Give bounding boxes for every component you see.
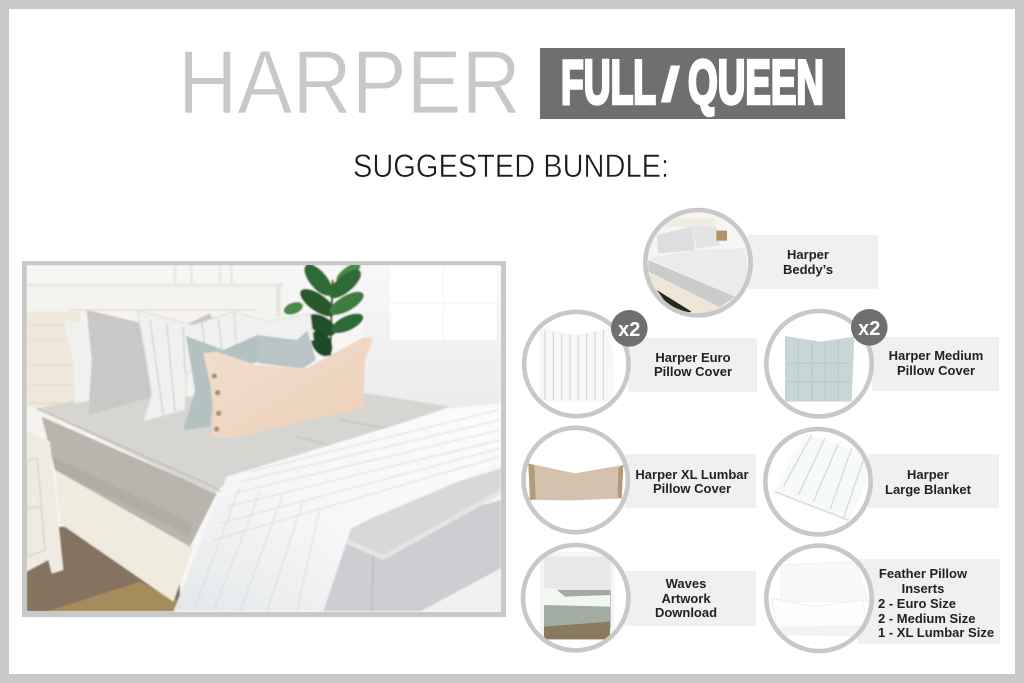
floor and rug	[27, 527, 180, 612]
blanket	[173, 403, 501, 612]
circle ring	[524, 428, 628, 532]
label text	[655, 576, 717, 620]
label text: 2 - Medium Size	[878, 611, 976, 626]
label panel	[872, 337, 999, 391]
label panel	[748, 235, 878, 289]
item: Harper Beddy's	[642, 207, 878, 320]
circle ring	[766, 311, 872, 416]
heading: suggested bundle: SUGGESTED BUNDLE:	[353, 148, 669, 184]
far side of mattress	[323, 500, 501, 612]
label text	[635, 467, 749, 496]
label text	[783, 247, 833, 277]
size badge: Full/Queen	[540, 48, 845, 119]
label text: 2 - Euro Size	[878, 596, 956, 611]
striped euro pillow	[137, 311, 237, 422]
quantity badge	[611, 310, 648, 347]
circle ring	[524, 312, 628, 416]
label text: Harper Euro	[655, 350, 731, 365]
label text: Harper XL Lumbar	[635, 467, 749, 482]
size badge: Full/Queen: FULL	[561, 48, 656, 118]
lumbar pillow	[203, 337, 373, 438]
item image	[785, 336, 854, 402]
label text: Feather Pillow	[879, 566, 968, 581]
label panel	[625, 454, 756, 508]
quilted top	[37, 393, 450, 493]
label text	[878, 566, 994, 640]
label text: Harper Medium	[889, 348, 983, 363]
label text: Artwork	[661, 591, 711, 606]
headboard	[27, 284, 284, 408]
label panel	[628, 338, 757, 392]
label panel	[868, 454, 999, 508]
item: Harper XL Lumbar Pillow Cover	[522, 427, 756, 537]
label text: Waves	[666, 576, 706, 591]
bed frame	[55, 471, 193, 602]
label text: Inserts	[902, 581, 944, 596]
panel: bedroom photo	[24, 260, 504, 614]
quantity badge: x2	[858, 318, 880, 340]
quantity badge	[851, 309, 888, 346]
label text: Beddy’s	[783, 262, 833, 277]
plant	[282, 265, 365, 358]
label text: Pillow Cover	[653, 481, 731, 496]
back left pillow	[63, 318, 92, 403]
label panel	[858, 559, 1000, 644]
item image	[771, 562, 870, 636]
label text: Pillow Cover	[897, 363, 975, 378]
item image	[540, 552, 626, 640]
item image	[648, 212, 748, 314]
mattress side	[42, 417, 217, 547]
label text: Download	[655, 605, 717, 620]
back right pillow	[235, 312, 313, 347]
back small pillow	[189, 313, 212, 325]
label text: Harper	[787, 247, 829, 262]
label text: Harper	[907, 467, 949, 482]
circle ring	[765, 429, 871, 534]
item image	[528, 464, 626, 500]
quantity badge: x2	[618, 319, 640, 341]
label text: 1 - XL Lumbar Size	[878, 625, 994, 640]
item: Feather Pillow Inserts	[765, 545, 1000, 655]
item: Waves Artwork Download	[522, 545, 756, 655]
label text: Large Blanket	[885, 482, 972, 497]
item: Harper Medium Pillow Cover	[765, 309, 999, 420]
nightstand	[27, 430, 63, 573]
label text	[885, 467, 972, 497]
size badge: Full/Queen: QUEEN	[688, 48, 824, 118]
label text	[889, 348, 983, 378]
grey pillow	[87, 310, 153, 415]
item: Harper Large Blanket	[765, 428, 999, 538]
circle ring	[645, 210, 751, 315]
item: Harper Euro Pillow Cover	[522, 310, 757, 420]
size badge: Full/Queen: /	[661, 59, 680, 112]
medium pillow right	[257, 331, 316, 368]
item image	[544, 330, 604, 400]
circle ring	[766, 546, 872, 651]
circle ring	[523, 545, 628, 650]
label panel	[625, 571, 756, 626]
item image	[774, 434, 868, 521]
title: Harper: HARPER	[178, 33, 521, 133]
medium pillow left	[183, 335, 259, 430]
label text: Pillow Cover	[654, 364, 732, 379]
label text	[654, 350, 732, 379]
